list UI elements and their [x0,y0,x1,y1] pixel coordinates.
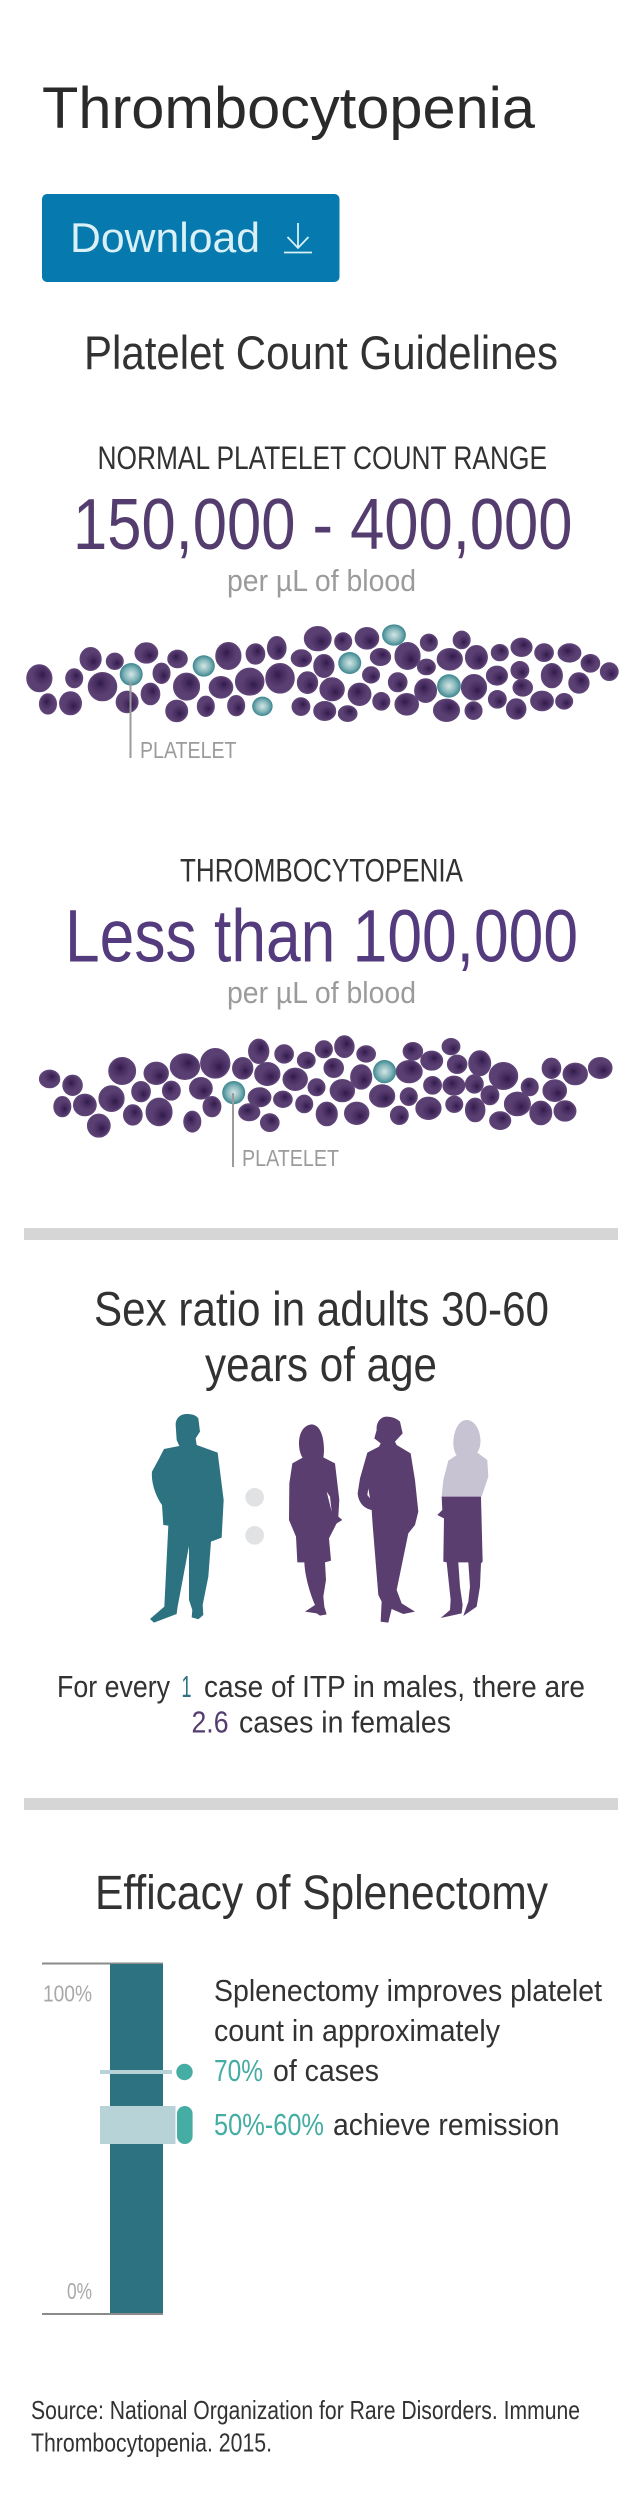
figures: one male to 2.6 females [150,1414,488,1623]
icon: download arrow [284,223,312,252]
efficacy text: Splenectomy improves platelet [214,1973,602,2008]
panel: efficacy of splenectomy [42,1867,602,2314]
thrombocytopenia label: THROMBOCYTOPENIA [180,852,464,888]
sex ratio sentence: For every [57,1669,170,1704]
thrombocytopenia unit: per µL of blood [227,975,416,1010]
normal range label: NORMAL PLATELET COUNT RANGE [98,440,547,476]
efficacy text: of cases [273,2053,379,2088]
platelet illustration: low [40,1036,612,1137]
platelet leader line [232,1093,234,1167]
normal range unit: per µL of blood [227,563,416,598]
icon: female silhouette 3 partial [437,1420,488,1618]
efficacy text: achieve remission [333,2107,560,2142]
platelet illustration: normal [27,624,618,722]
download button [42,194,340,282]
sex ratio sentence: cases in females [239,1704,451,1740]
50-60% range marker [100,2106,193,2144]
download button: Download [70,214,260,261]
sex ratio sentence: 2.6 [192,1704,228,1740]
sex ratio sentence: 1 [182,1669,192,1704]
icon: female silhouette 1 [289,1424,342,1616]
icon: female silhouette 2 [358,1417,418,1623]
heading: sex ratio [94,1284,549,1392]
normal range value: 150,000 - 400,000 [73,485,572,565]
heading: platelet count guidelines: Platelet Count Guidelines [84,326,558,379]
panel: normal platelet count [27,440,618,763]
source note: Thrombocytopenia. 2015. [31,2428,272,2458]
efficacy text: 70% [214,2053,263,2088]
efficacy text: 50%-60% [214,2107,324,2142]
sex ratio sentence [57,1669,585,1740]
axis label 100%: 100% [43,1980,92,2006]
sex ratio sentence: case of ITP in males, there are [204,1669,585,1704]
axis label 0%: 0% [67,2278,92,2304]
efficacy text [214,1973,602,2142]
colon dots [245,1488,264,1545]
platelet label: PLATELET [242,1145,339,1171]
70% marker [100,2064,193,2080]
heading: efficacy: Efficacy of Splenectomy [95,1867,548,1920]
platelet label: PLATELET [140,737,236,763]
efficacy text: count in approximately [214,2013,500,2048]
platelet leader line [130,682,132,758]
bar chart [42,1964,193,2314]
heading: sex ratio: Sex ratio in adults 30-60 [94,1284,549,1336]
icon: male silhouette [150,1414,224,1623]
heading: sex ratio: years of age [205,1339,437,1392]
panel: thrombocytopenia count [40,852,612,1171]
source note [31,2395,580,2458]
panel: sex ratio [57,1284,585,1740]
title: Thrombocytopenia [42,76,536,141]
bar [110,1964,163,2313]
